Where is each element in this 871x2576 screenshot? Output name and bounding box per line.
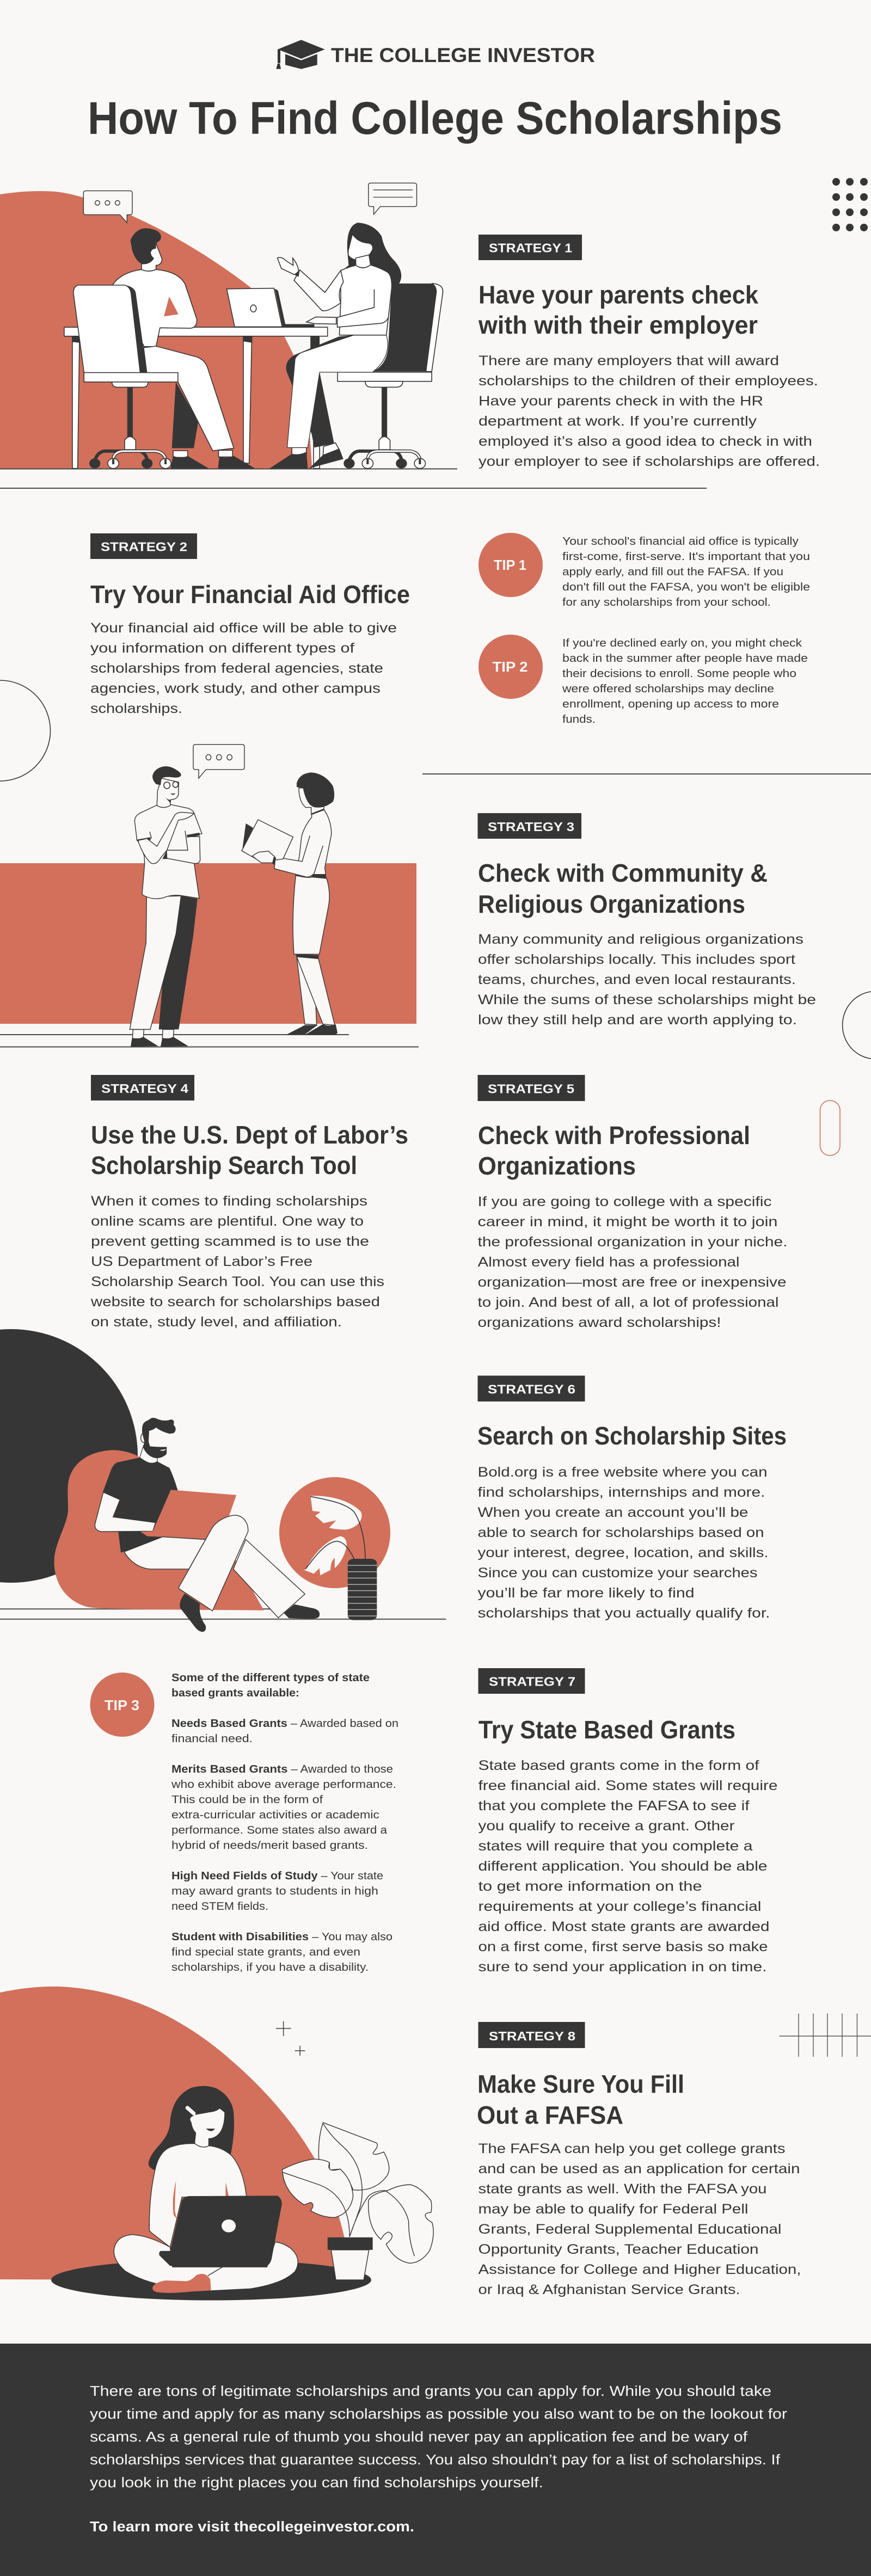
logo — [276, 40, 595, 69]
panel: strategy 6 — [477, 1376, 787, 1621]
body: strategy 3: While the sums of these scholarships might be — [478, 992, 816, 1007]
legs — [114, 2235, 298, 2291]
text: tip 1: first-come, first-serve. It's important that you — [562, 550, 810, 563]
body: strategy 3: teams, churches, and even local restaurants. — [478, 972, 796, 987]
thigh — [124, 1537, 206, 1569]
body: strategy 3: offer scholarships locally. This includes sport — [478, 952, 795, 967]
badge: strategy 6: STRATEGY 6 — [488, 1382, 575, 1397]
man ankles and shoes — [173, 451, 188, 457]
man head — [142, 243, 162, 271]
heading: strategy 1 — [478, 281, 758, 339]
body: strategy 8: Opportunity Grants, Teacher Education — [478, 2242, 759, 2257]
body: strategy 5: Almost every field has a professional — [478, 1255, 739, 1270]
badge: strategy 6 — [478, 1376, 585, 1401]
body: strategy 5: to join. And best of all, a lot of professional — [478, 1295, 778, 1310]
text: tip 3: Needs Based Grants – Awarded based on — [171, 1717, 398, 1730]
badge: strategy 7: STRATEGY 7 — [489, 1674, 575, 1688]
badge: tip 1 — [479, 533, 543, 597]
body: strategy 5: the professional organization in your niche. — [478, 1234, 787, 1250]
text: tip 1 — [562, 535, 810, 608]
badge: strategy 3: STRATEGY 3 — [488, 820, 574, 834]
man chair — [124, 285, 147, 373]
footer text: your time and apply for as many scholarships as possible you also want to be on the lookout for — [90, 2407, 788, 2422]
panel: tip 3 — [90, 1671, 398, 1974]
body: strategy 5 — [478, 1194, 787, 1330]
body: strategy 1: scholarships to the children of their employees. — [479, 373, 818, 389]
body: strategy 8: Assistance for College and Higher Education, — [478, 2262, 801, 2277]
body: strategy 3: Many community and religious organizations — [478, 932, 803, 947]
text: tip 3: financial need. — [171, 1732, 253, 1745]
body: strategy 6: your interest, degree, location, and skills. — [478, 1545, 769, 1560]
text: tip 3: find special state grants, and even — [171, 1946, 360, 1958]
text: tip 3: may award grants to students in high — [171, 1885, 378, 1897]
footer text — [90, 2384, 788, 2491]
heading: strategy 3 — [478, 859, 768, 918]
footer text: scholarships services that guarantee success. You also shouldn’t pay for a list of scholarships. If — [90, 2452, 781, 2468]
body: strategy 8: may be able to qualify for Federal Pell — [478, 2202, 748, 2217]
body: strategy 7: free financial aid. Some states will require — [478, 1778, 777, 1793]
body: strategy 1: your employer to see if scholarships are offered. — [479, 454, 820, 469]
heading: strategy 6: Search on Scholarship Sites — [477, 1422, 787, 1450]
text: tip 3: based grants available: — [171, 1687, 299, 1699]
body: strategy 4: prevent getting scammed is to use the — [91, 1234, 369, 1249]
body: strategy 7: aid office. Most state grants are awarded — [478, 1919, 770, 1934]
table top — [64, 327, 328, 336]
laptop — [275, 289, 314, 327]
badge: strategy 3 — [478, 813, 581, 839]
text: tip 1: Your school's financial aid office is typically — [562, 535, 799, 548]
footer call to action: To learn more visit thecollegeinvestor.com. — [90, 2519, 414, 2535]
text: tip 3: performance. Some states also award a — [171, 1824, 388, 1836]
badge: strategy 4 — [91, 1075, 194, 1101]
body: strategy 4: Scholarship Search Tool. You can use this — [91, 1274, 384, 1289]
body: strategy 3: low they still help and are worth applying to. — [478, 1012, 797, 1028]
laptop — [159, 2196, 282, 2266]
footer text: There are tons of legitimate scholarships and grants you can apply for. While you should take — [90, 2384, 771, 2399]
body: strategy 8: The FAFSA can help you get college grants — [478, 2141, 785, 2156]
decoration: dot grid — [832, 178, 868, 231]
heading: strategy 5 — [478, 1121, 750, 1180]
badge: tip 3 — [90, 1673, 155, 1737]
text: tip 3: High Need Fields of Study – Your state — [171, 1870, 383, 1882]
plant — [318, 2123, 389, 2190]
text: tip 3: Some of the different types of state — [171, 1671, 370, 1684]
body: strategy 4: US Department of Labor’s Free — [91, 1254, 312, 1269]
body: strategy 6: scholarships that you actually qualify for. — [478, 1606, 770, 1621]
panel: strategy 4 — [90, 1075, 408, 1330]
body: strategy 4: When it comes to finding scholarships — [91, 1194, 367, 1209]
logo: THE COLLEGE INVESTOR — [331, 44, 595, 66]
heading: strategy 4: Use the U.S. Dept of Labor’s — [91, 1121, 408, 1149]
folder — [242, 823, 253, 850]
illustration: two people talking — [0, 745, 419, 1047]
sock — [152, 2274, 211, 2293]
panel: strategy 3 — [478, 813, 816, 1028]
woman head — [299, 788, 324, 814]
man legs — [159, 896, 198, 1029]
body: strategy 6: find scholarships, internships and more. — [478, 1485, 765, 1500]
body: strategy 1 — [479, 353, 820, 469]
body: strategy 6: When you create an account you’ll be — [478, 1505, 748, 1520]
badge: strategy 4: STRATEGY 4 — [101, 1081, 188, 1096]
text: tip 2 — [562, 637, 808, 726]
footer text: scams. As a general rule of thumb you should never pay an application fee and be wary of — [90, 2430, 748, 2445]
footer panel — [0, 2344, 871, 2576]
woman torso — [296, 809, 332, 876]
panel: tip 2 — [479, 635, 808, 726]
body: strategy 6: Bold.org is a free website where you can — [478, 1465, 768, 1480]
text: tip 2: enrollment, opening up access to more — [562, 698, 779, 710]
title: How To Find College Scholarships — [88, 93, 782, 144]
man torso — [134, 804, 202, 899]
body: strategy 3 — [478, 932, 816, 1028]
panel: strategy 7 — [478, 1668, 777, 1975]
heading: strategy 8 — [477, 2070, 684, 2129]
laptop — [140, 1490, 236, 1540]
badge: strategy 2: STRATEGY 2 — [101, 540, 187, 554]
heading: strategy 7: Try State Based Grants — [479, 1716, 735, 1744]
heading: strategy 4 — [91, 1121, 408, 1179]
text: tip 1: don't fill out the FAFSA, you won't be eligible — [562, 581, 810, 593]
text: tip 3 — [171, 1671, 398, 1974]
panel: strategy 5 — [478, 1075, 787, 1330]
speech bubble — [193, 745, 244, 778]
body: strategy 4: on state, study level, and affiliation. — [91, 1314, 342, 1330]
man head — [157, 778, 179, 808]
footer text: you look in the right places you can find scholarships yourself. — [90, 2475, 543, 2491]
arm — [95, 1492, 156, 1532]
heading: strategy 1: Have your parents check — [479, 281, 758, 309]
body: strategy 2: scholarships from federal agencies, state — [90, 661, 383, 676]
pot — [331, 2250, 369, 2280]
badge: tip 2: TIP 2 — [492, 659, 528, 675]
illustration: man reading on a bean bag — [0, 1329, 446, 1632]
hair — [149, 2086, 234, 2171]
body: strategy 6: you’ll be far more likely to find — [478, 1585, 695, 1601]
badge: strategy 8: STRATEGY 8 — [489, 2029, 575, 2043]
text: tip 1: apply early, and fill out the FAFSA. If you — [562, 565, 783, 578]
vase — [348, 1559, 377, 1620]
badge: strategy 5: STRATEGY 5 — [488, 1082, 574, 1096]
heading: strategy 4: Scholarship Search Tool — [91, 1151, 357, 1179]
body: strategy 8: state grants as well. With the FAFSA you — [478, 2181, 766, 2197]
text: tip 3: This could be in the form of — [171, 1793, 323, 1806]
body: strategy 1: department at work. If you’re currently — [479, 414, 757, 429]
body: strategy 1: There are many employers that will award — [479, 353, 779, 368]
badge: tip 2 — [479, 635, 543, 699]
badge: strategy 2 — [90, 533, 197, 559]
text: tip 2: funds. — [562, 713, 596, 726]
heading: strategy 5: Check with Professional — [478, 1121, 750, 1149]
body: strategy 1: employed it’s also a good idea to check in with — [479, 434, 812, 449]
body: strategy 8: and can be used as an application for certain — [478, 2161, 800, 2177]
woman torso and arms — [341, 223, 401, 284]
speech bubble left — [83, 191, 132, 223]
body: strategy 4: online scams are plentiful. One way to — [91, 1214, 364, 1229]
text: tip 2: If you're declined early on, you might check — [562, 637, 802, 649]
body: strategy 2: Your financial aid office will be able to give — [90, 620, 397, 636]
panel: tip 1 — [479, 533, 810, 608]
body: strategy 7: State based grants come in the form of — [478, 1758, 759, 1773]
text: tip 3: Student with Disabilities – You may also — [171, 1931, 392, 1943]
body: strategy 7: you qualify to receive a grant. Other — [478, 1818, 735, 1834]
text: tip 3: Merits Based Grants – Awarded to those — [171, 1763, 393, 1775]
panel: strategy 2 — [90, 533, 410, 716]
body: strategy 7 — [478, 1758, 777, 1975]
illustration: woman with laptop and plant — [0, 1987, 433, 2300]
legs and feet — [284, 1604, 320, 1619]
badge: tip 1: TIP 1 — [494, 557, 526, 573]
woman chair — [372, 284, 436, 372]
body: strategy 2 — [90, 620, 397, 716]
text: tip 3: scholarships, if you have a disability. — [171, 1961, 369, 1974]
man body — [113, 269, 197, 347]
body: strategy 7: states will require that you complete a — [478, 1839, 753, 1854]
body: strategy 6: Since you can customize your searches — [478, 1565, 758, 1581]
badge: strategy 1 — [479, 235, 582, 260]
heading: strategy 8: Out a FAFSA — [477, 2101, 623, 2129]
body: strategy 7: requirements at your college’s financial — [478, 1899, 761, 1914]
body: strategy 7: that you complete the FAFSA to see if — [478, 1798, 750, 1813]
body: strategy 7: on a first come, first serve basis so make — [478, 1939, 768, 1954]
text: tip 2: back in the summer after people have made — [562, 652, 808, 665]
text: tip 2: their decisions to enroll. Some people who — [562, 667, 796, 680]
body: strategy 2: scholarships. — [90, 701, 182, 716]
badge: strategy 8 — [478, 2022, 585, 2048]
head — [140, 1446, 157, 1463]
man far leg — [172, 382, 198, 448]
illustration: two people at a desk — [0, 183, 707, 488]
badge: strategy 5 — [478, 1075, 585, 1101]
heading: strategy 5: Organizations — [478, 1152, 636, 1180]
body: strategy 5: If you are going to college with a specific — [478, 1194, 772, 1209]
plant — [310, 1496, 362, 1530]
body: strategy 8 — [478, 2141, 801, 2297]
body: strategy 5: career in mind, it might be worth it to join — [478, 1214, 777, 1229]
body: strategy 2: you information on different types of — [90, 641, 354, 656]
bean bag — [54, 1450, 264, 1610]
panel: strategy 8 — [477, 2022, 801, 2297]
text: tip 3: who exhibit above average performance. — [171, 1778, 396, 1791]
body: strategy 7: different application. You should be able — [478, 1859, 768, 1874]
body: strategy 4: website to search for scholarships based — [90, 1294, 380, 1309]
text: tip 3: hybrid of needs/merit based grants. — [171, 1839, 368, 1852]
heading: strategy 1: with with their employer — [478, 311, 758, 339]
body: strategy 4 — [90, 1194, 384, 1330]
body: strategy 8: Grants, Federal Supplemental Educational — [478, 2222, 782, 2237]
body: strategy 8: or Iraq & Afghanistan Service Grants. — [478, 2282, 740, 2297]
shirt — [103, 1458, 178, 1553]
text: tip 3: need STEM fields. — [171, 1900, 268, 1913]
heading: strategy 3: Religious Organizations — [478, 890, 745, 918]
woman legs — [297, 957, 317, 1025]
face — [190, 2108, 224, 2147]
woman skirt — [293, 876, 329, 954]
body: strategy 7: sure to send your application in on time. — [478, 1959, 766, 1975]
heading: strategy 3: Check with Community & — [478, 859, 768, 887]
body: strategy 6 — [478, 1465, 770, 1621]
panel: strategy 1 — [478, 235, 820, 469]
body: strategy 2: agencies, work study, and other campus — [90, 681, 381, 696]
badge: tip 3: TIP 3 — [105, 1697, 139, 1713]
body: strategy 5: organization—most are free or inexpensive — [478, 1275, 786, 1290]
woman legs — [286, 335, 354, 447]
heading: strategy 2: Try Your Financial Aid Office — [90, 580, 410, 608]
body: strategy 5: organizations award scholarships! — [478, 1315, 721, 1330]
body: strategy 1: Have your parents check in with the HR — [479, 394, 763, 409]
body: strategy 7: to get more information on the — [478, 1879, 702, 1894]
badge: strategy 7 — [478, 1668, 585, 1694]
body — [149, 2143, 247, 2247]
text: tip 3: extra-curricular activities or academic — [171, 1809, 379, 1821]
text: tip 1: for any scholarships from your school. — [562, 596, 771, 608]
decoration: crosshatch — [780, 2014, 871, 2057]
icon: graduation cap — [276, 40, 325, 69]
heading: strategy 8: Make Sure You Fill — [477, 2070, 684, 2098]
badge: strategy 1: STRATEGY 1 — [489, 241, 572, 255]
plus signs — [276, 2021, 305, 2056]
table legs — [72, 336, 79, 469]
body: strategy 6: able to search for scholarships based on — [478, 1525, 764, 1540]
text: tip 2: were offered scholarships may decline — [562, 683, 774, 695]
speech bubble right — [369, 183, 416, 214]
